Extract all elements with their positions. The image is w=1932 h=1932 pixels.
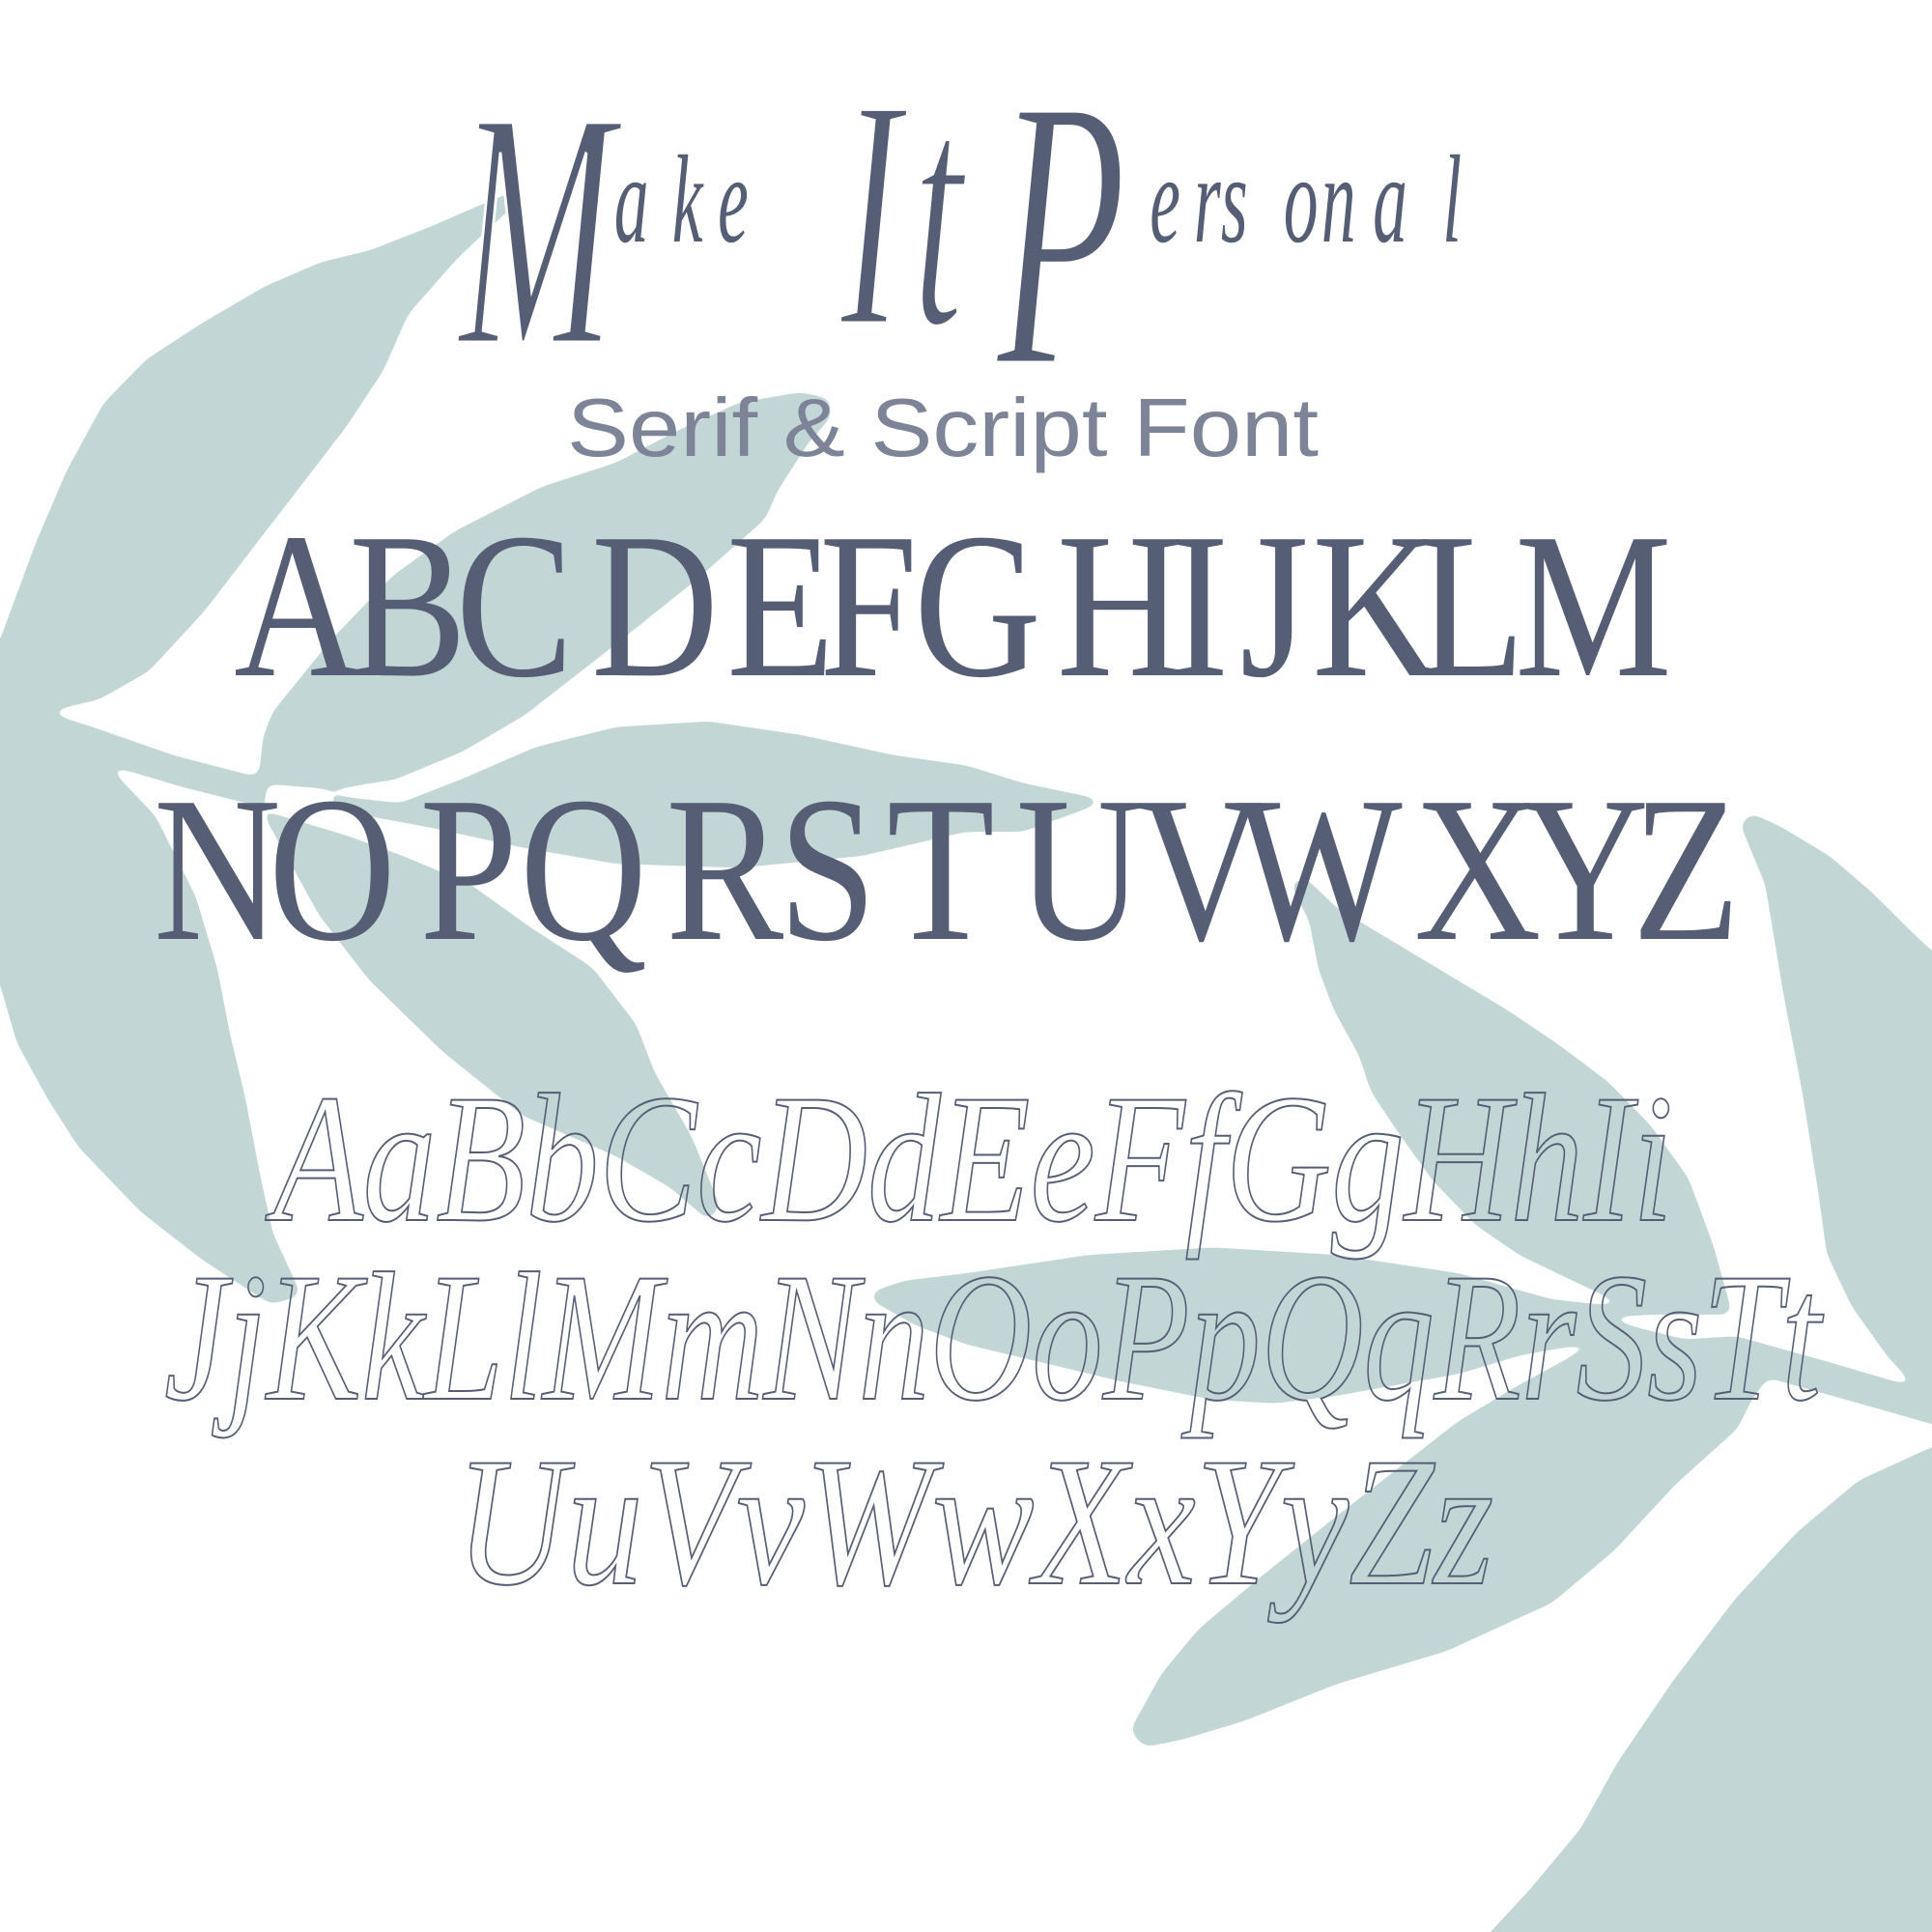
subtitle: Serif & Script Font [567,383,1319,474]
leaf: large lower diagonal leaf [1132,1342,1767,1745]
left foliage group [0,194,1099,1302]
leaf: lower-middle diagonal leaf [265,813,718,1218]
serif alphabet row 2: NOPQRSTUVWXYZ [154,754,1740,984]
title: I [838,32,908,395]
leaf: tall diagonal leaf at centre right [1293,880,1730,1313]
leaf: horizontal middle leaf [327,724,1099,866]
title: ake [614,130,749,270]
title: M [456,43,625,417]
leaf: upper-middle diagonal leaf [261,394,829,787]
leaf: large top-left leaf with stem and lower-left leaf [0,194,511,1302]
right foliage group [873,815,1932,1932]
serif alphabet row 1: ABCDEFGHIJKLM [234,491,1672,721]
title: P [993,18,1126,447]
script alphabet row 3: UuVvWwXxYyZz [456,1421,1493,1624]
leaf: horizontal lower leaf [873,1250,1681,1402]
leaf: right edge leaf with stem [1674,815,1932,1427]
title: t [913,32,969,395]
leaf: bottom right corner leaf [1471,1442,1932,1932]
title: ersonal [1150,130,1462,270]
